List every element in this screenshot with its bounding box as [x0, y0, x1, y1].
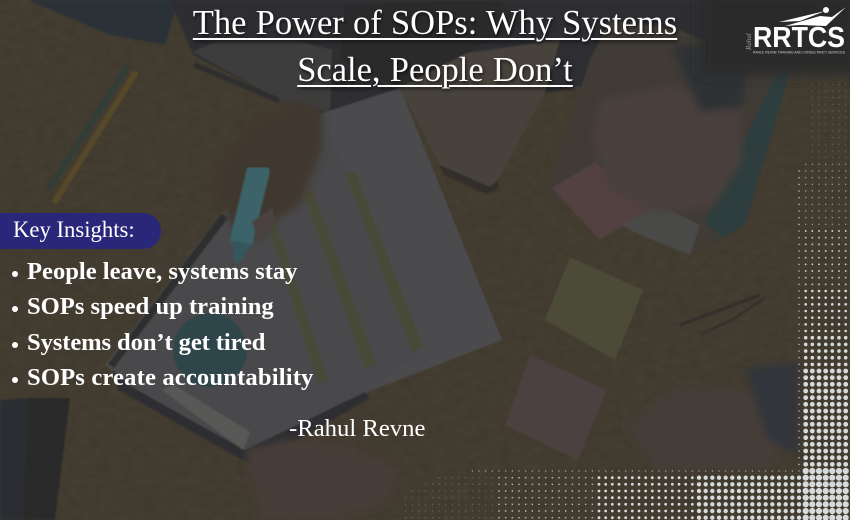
- author attribution: -Rahul Revne: [289, 415, 425, 442]
- key insights list: Systems don’t get tired: [27, 329, 265, 356]
- key insights list: [12, 258, 314, 391]
- logo: RRTCS: Rahul: [745, 33, 753, 51]
- key insights list: SOPs speed up training: [27, 293, 274, 320]
- key insights badge: Key Insights:: [13, 217, 135, 242]
- logo: RRTCS: RRTCS: [753, 22, 845, 54]
- key insights list: People leave, systems stay: [27, 258, 297, 285]
- title: Scale, People Don’t: [297, 51, 573, 89]
- logo: RRTCS: [745, 7, 846, 54]
- key insights badge: [0, 213, 161, 249]
- key insights list: SOPs create accountability: [27, 364, 314, 391]
- title: [192, 4, 678, 92]
- logo: RRTCS: RAHUL REVNE TRAINING AND CONSULTANCY SERVICES: [753, 50, 846, 54]
- title: The Power of SOPs: Why Systems: [193, 4, 677, 42]
